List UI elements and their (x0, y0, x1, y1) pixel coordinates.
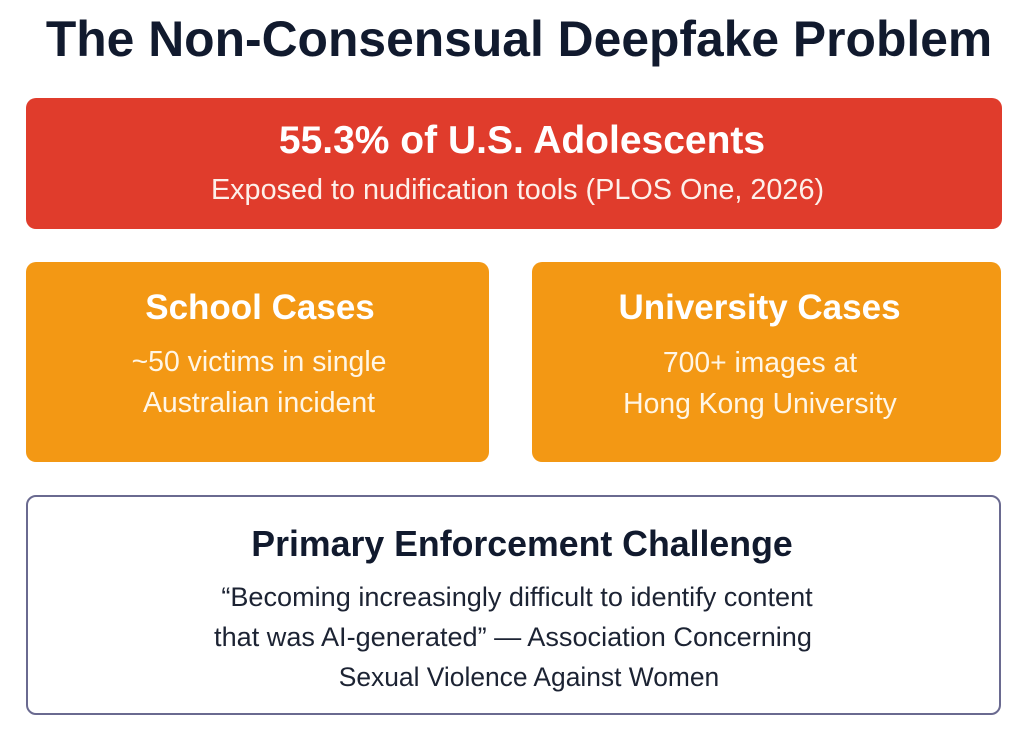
university cases text (623, 346, 897, 419)
statistic description: Exposed to nudification tools (PLOS One, 2026) (211, 174, 824, 206)
panel: university cases (532, 262, 1001, 462)
panel: adolescents statistic (26, 98, 1002, 229)
school cases heading: School Cases (145, 288, 375, 327)
statistic heading: 55.3% of U.S. Adolescents (279, 119, 765, 162)
school cases text: Australian incident (143, 387, 375, 419)
panel: school cases (26, 262, 489, 462)
school cases text: ~50 victims in single (132, 346, 386, 378)
university cases text: 700+ images at (663, 346, 857, 378)
enforcement quote: “Becoming increasingly difficult to identify content (221, 581, 813, 612)
university cases heading: University Cases (618, 288, 901, 327)
enforcement quote: Sexual Violence Against Women (339, 662, 719, 692)
enforcement quote: that was AI-generated” — Association Concerning (214, 621, 812, 652)
university cases text: Hong Kong University (623, 387, 897, 419)
enforcement quote (214, 581, 813, 692)
school cases text (132, 346, 386, 419)
title: The Non-Consensual Deepfake Problem (46, 11, 992, 67)
panel: enforcement challenge (26, 495, 1001, 715)
enforcement heading: Primary Enforcement Challenge (251, 524, 793, 564)
